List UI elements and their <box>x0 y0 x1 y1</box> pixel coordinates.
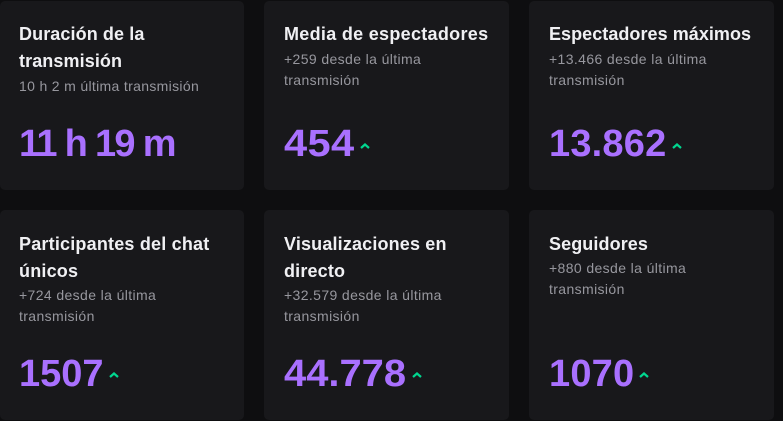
heading: Duración de la <box>19 24 144 44</box>
value: 13.862 <box>549 123 666 165</box>
subtext: +724 desde la última <box>19 287 156 303</box>
value: 1507 <box>19 353 104 395</box>
heading <box>19 24 144 71</box>
subtext: transmisión <box>19 308 95 324</box>
value: 44.778 <box>284 353 406 395</box>
subtext <box>284 51 421 88</box>
heading: Visualizaciones en <box>284 234 447 254</box>
icon: up arrow <box>672 143 682 149</box>
subtext: +32.579 desde la última <box>284 287 442 303</box>
subtext: +880 desde la última <box>549 260 686 276</box>
value: 454 <box>284 123 354 165</box>
heading: transmisión <box>19 51 122 71</box>
icon: up arrow <box>412 372 422 378</box>
subtext: +13.466 desde la última <box>549 51 707 67</box>
value: 11 h 19 m <box>19 123 175 165</box>
heading: directo <box>284 261 345 281</box>
heading: Espectadores máximos <box>549 24 751 44</box>
subtext <box>284 287 442 324</box>
heading: únicos <box>19 261 78 281</box>
panel: media de espectadores <box>264 1 509 190</box>
subtext: transmisión <box>549 281 625 297</box>
heading: Media de espectadores <box>284 24 488 44</box>
icon: up arrow <box>360 143 370 149</box>
panel: seguidores <box>529 210 774 420</box>
subtext <box>549 260 686 297</box>
heading <box>284 234 447 281</box>
subtext: 10 h 2 m última transmisión <box>19 78 199 94</box>
heading <box>19 234 210 281</box>
subtext: transmisión <box>549 72 625 88</box>
icon: up arrow <box>639 372 649 378</box>
panel: espectadores máximos <box>529 1 774 190</box>
subtext <box>19 287 156 324</box>
panel: visualizaciones en directo <box>264 210 509 420</box>
heading: Seguidores <box>549 234 648 254</box>
heading: Participantes del chat <box>19 234 209 254</box>
panel: duración de la transmisión <box>0 1 244 190</box>
subtext: transmisión <box>284 308 360 324</box>
subtext: transmisión <box>284 72 360 88</box>
subtext <box>549 51 707 88</box>
icon: up arrow <box>109 372 119 378</box>
subtext: +259 desde la última <box>284 51 421 67</box>
panel: participantes del chat únicos <box>0 210 244 420</box>
value: 1070 <box>549 353 634 395</box>
